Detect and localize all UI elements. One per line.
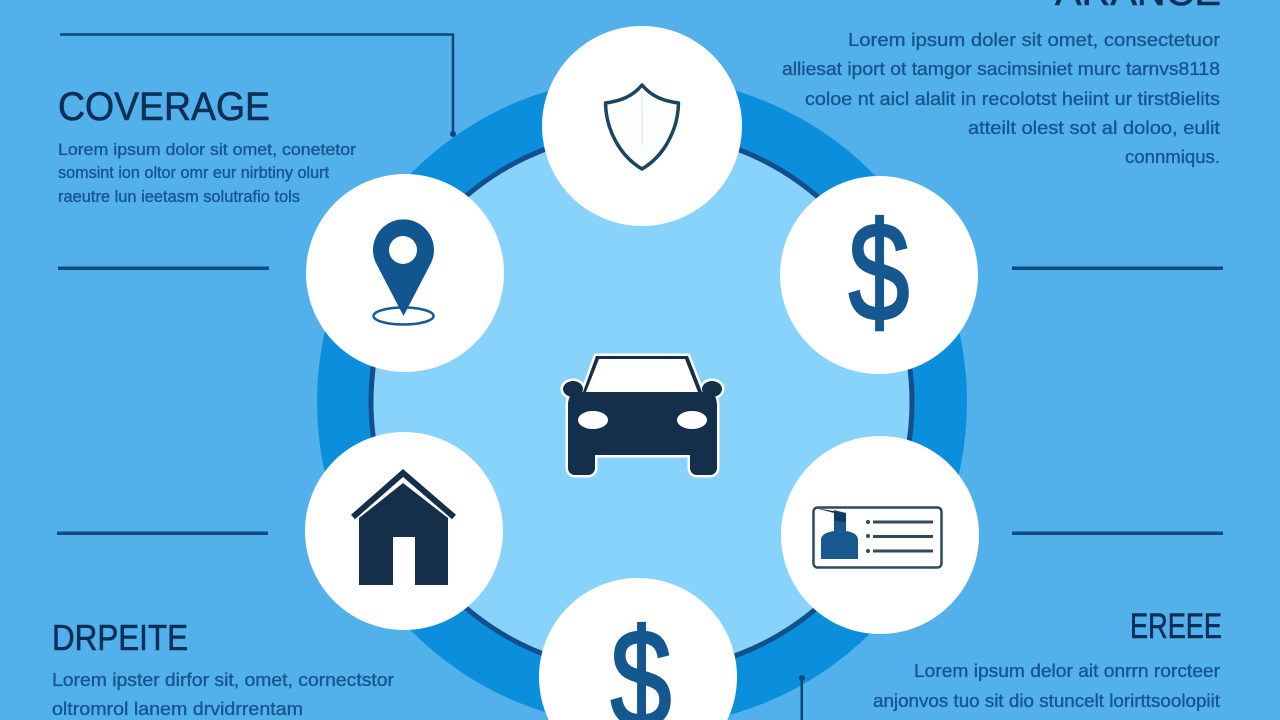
- top right body text: connmiqus.: [1125, 146, 1220, 167]
- bottom right body text: anjonvos tuo sit dio stuncelt lorirttsoolopiit: [873, 690, 1220, 711]
- text block: bottom right: [873, 607, 1222, 711]
- divider line: right upper: [1012, 266, 1223, 270]
- icon node: shield: [542, 26, 742, 226]
- divider line: left lower: [57, 532, 268, 535]
- coverage body text: [58, 140, 356, 206]
- icon node: house: [305, 432, 503, 630]
- bottom left body text: oltromrol lanem drvidrrentam: [52, 698, 303, 719]
- bottom left body text: Lorem ipster dirfor sit, omet, cornectstor: [52, 669, 394, 690]
- icon node: location pin: [306, 174, 504, 372]
- coverage body text: Lorem ipsum dolor sit omet, conetetor: [58, 140, 356, 159]
- text block: top right: [782, 0, 1221, 167]
- coverage body text: somsint ion oltor omr eur nirbtiny olurt: [58, 163, 329, 182]
- car white halo: [563, 356, 722, 475]
- icon node: dollar upper right: $: [849, 193, 909, 350]
- text block: coverage: [58, 85, 356, 206]
- central ring diagram: [317, 77, 967, 720]
- bottom right body text: Lorem ipsum delor ait onrrn rorcteer: [914, 660, 1220, 681]
- icon node: dollar upper right: [780, 176, 978, 374]
- top right body text: alliesat iport ot tamgor sacimsiniet murc tarnvs8118: [782, 58, 1220, 79]
- heading: coverage: COVERAGE: [58, 85, 270, 129]
- text block: bottom left: [52, 617, 394, 719]
- car mirrors: [563, 381, 722, 397]
- outer blue ring: [317, 77, 967, 720]
- car windshield: [586, 359, 698, 392]
- top right body text: coloe nt aicl alalit in recolotst heiint ur tirst8ielits: [805, 88, 1220, 109]
- icon node: id card: [781, 436, 979, 634]
- dark inner ring stroke: [371, 132, 912, 672]
- heading: ereee: EREEE: [1130, 607, 1222, 646]
- divider line: right lower: [1012, 532, 1223, 535]
- coverage body text: raeutre lun ieetasm solutrafio tols: [58, 187, 300, 206]
- connector: top left: [60, 34, 456, 137]
- bottom right body text: [873, 660, 1220, 711]
- top right body text: Lorem ipsum doler sit omet, consectetuor: [848, 29, 1220, 50]
- car headlights: [578, 411, 707, 429]
- connector: bottom: [799, 675, 805, 720]
- divider line: left upper: [58, 266, 269, 270]
- top right body text: atteilt olest sot al doloo, eulit: [968, 117, 1220, 138]
- bottom left body text: [52, 669, 394, 719]
- top right body text: [782, 29, 1220, 167]
- heading: drpeite: DRPEITE: [52, 617, 188, 658]
- icon: car: [563, 356, 722, 475]
- icon node: dollar bottom: [539, 578, 737, 720]
- car body: [568, 356, 717, 475]
